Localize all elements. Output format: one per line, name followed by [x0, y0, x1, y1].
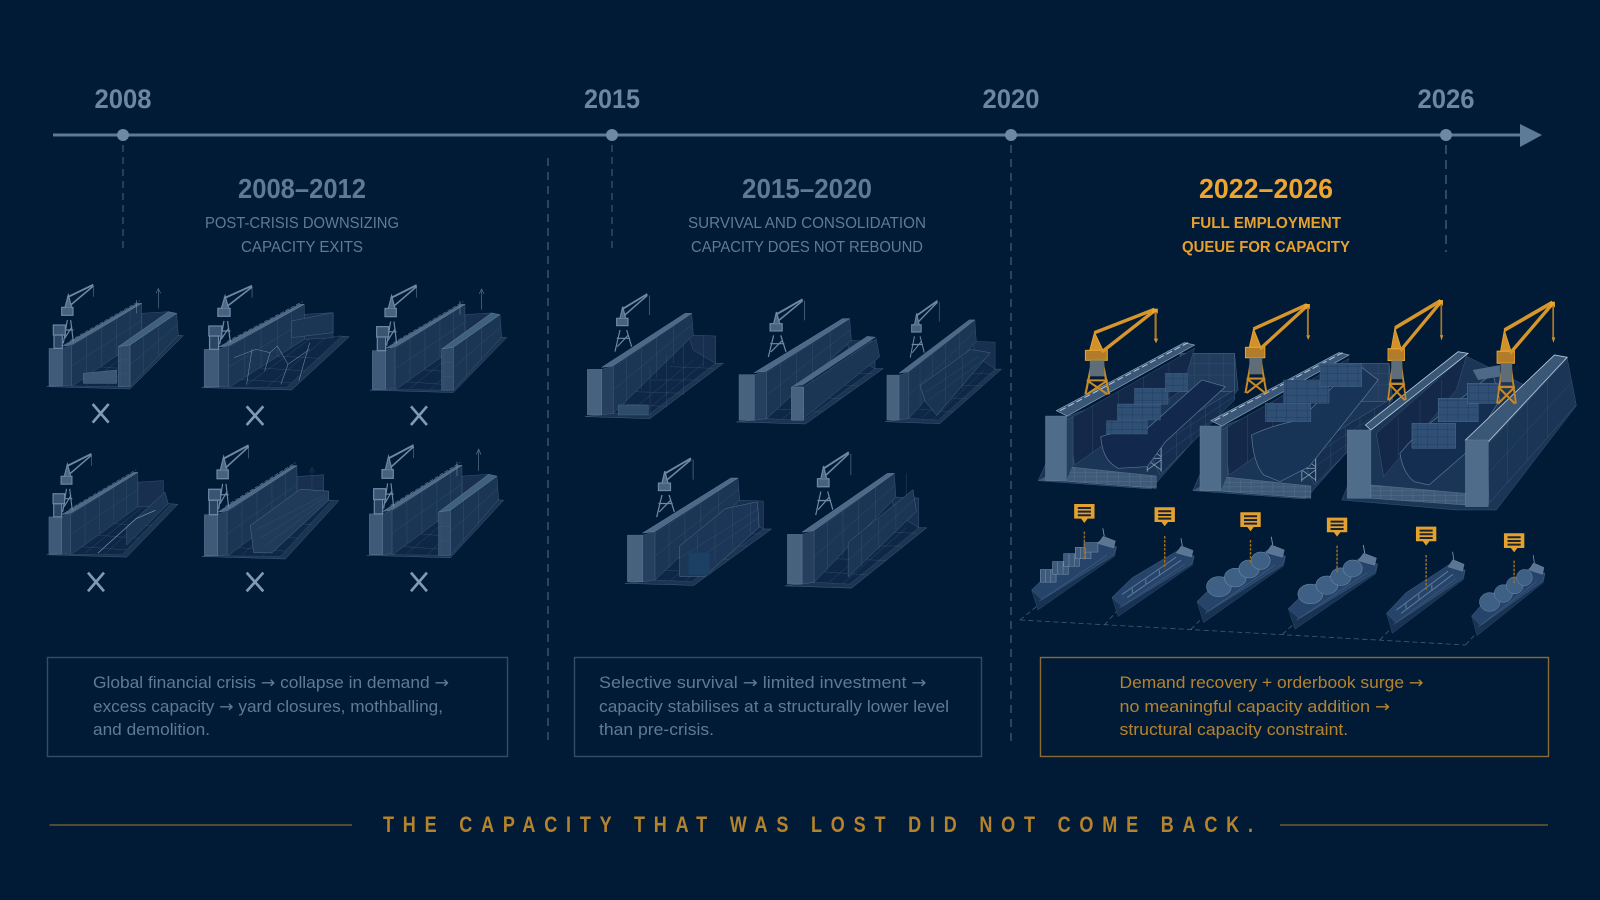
text box: global financial crisis: excess capacity → yard closures, mothballing, [93, 697, 443, 716]
ship 1: container [1032, 528, 1116, 610]
ship 2: tanker [1112, 538, 1194, 617]
order tag 6 [1504, 533, 1524, 583]
dock 5 [202, 445, 339, 559]
heading: 2022-2026 [1182, 173, 1350, 256]
ship 6: LNG [1472, 555, 1545, 636]
docks and X marks [47, 285, 507, 591]
crane 4 [1497, 302, 1555, 404]
queue ground line [1020, 607, 1476, 645]
milestone 2026 [1418, 84, 1474, 252]
timeline [53, 84, 1542, 252]
heading: 2015-2020: 2015–2020 [742, 173, 872, 204]
dock 6 [367, 445, 504, 558]
dock 2 with ship [1193, 353, 1393, 499]
heading: 2022-2026: 2022–2026 [1199, 173, 1333, 204]
X mark 2 [247, 406, 263, 425]
crane 1 [1085, 309, 1158, 394]
milestone 2020 [982, 84, 1040, 141]
milestone 2020: 2020 [982, 84, 1040, 114]
order tag 4 [1327, 518, 1347, 573]
dock 3 with ship and right wall [1342, 352, 1576, 510]
order tag 3 [1240, 512, 1261, 563]
closing text: THE CAPACITY THAT WAS LOST DID NOT COME BACK. [383, 813, 1253, 837]
text box: selective survival: capacity stabilises at a structurally lower level [599, 698, 949, 716]
heading: 2015-2020: CAPACITY DOES NOT REBOUND [691, 239, 923, 256]
right rule [1280, 824, 1548, 826]
X mark 5 [247, 573, 263, 591]
dock 2 [737, 299, 883, 424]
timeline axis [53, 134, 1525, 136]
heading: 2015-2020 [688, 173, 926, 256]
heading: 2008-2012: POST-CRISIS DOWNSIZING [205, 215, 399, 232]
heading: 2008-2012: 2008–2012 [238, 173, 366, 204]
dock 3 [370, 285, 507, 393]
order tag 5 [1416, 527, 1436, 590]
panel: 2008-2012 [47, 173, 507, 756]
milestone 2008 [94, 84, 152, 252]
text box: selective survival: than pre-crisis. [599, 721, 714, 739]
dock 3 [885, 301, 1002, 424]
order tag 2 [1155, 507, 1175, 568]
text box: selective survival: Selective survival → limited investment → [599, 673, 927, 692]
heading: 2008-2012: CAPACITY EXITS [241, 239, 363, 256]
docks [585, 294, 1002, 588]
ship 5: tanker [1387, 552, 1465, 633]
dock 1 [47, 285, 183, 389]
heading: 2015-2020: SURVIVAL AND CONSOLIDATION [688, 215, 926, 232]
milestone 2008: 2008 [94, 84, 152, 114]
text box: global financial crisis: and demolition. [93, 721, 210, 739]
X mark 4 [88, 573, 104, 591]
milestone 2015: 2015 [584, 84, 640, 114]
order tag 1 [1074, 504, 1095, 560]
panel: 2022-2026 [1020, 173, 1576, 756]
text box: demand recovery: Demand recovery + orderbook surge → [1120, 673, 1424, 692]
dock 5 [785, 452, 927, 588]
crane 2 [1245, 304, 1310, 393]
heading: 2022-2026: FULL EMPLOYMENT [1191, 215, 1341, 232]
panel: 2015-2020 [574, 173, 1002, 756]
heading: 2008-2012 [205, 173, 399, 256]
dock 4 [47, 454, 178, 557]
text box: demand recovery: structural capacity constraint. [1120, 721, 1348, 739]
dock 4 [625, 458, 772, 585]
left rule [50, 824, 352, 826]
X mark 6 [411, 573, 427, 591]
divider lines [548, 145, 1011, 745]
text box: demand recovery [1040, 658, 1548, 756]
heading: 2022-2026: QUEUE FOR CAPACITY [1182, 239, 1350, 256]
milestone 2026: 2026 [1418, 84, 1474, 114]
text box: global financial crisis: Global financial crisis → collapse in demand → [93, 673, 449, 692]
dock 1 with ship [1038, 343, 1238, 489]
docks, cranes, ships [1020, 300, 1576, 645]
text box: demand recovery: no meaningful capacity addition → [1120, 697, 1390, 716]
dock 2 damaged [202, 286, 349, 390]
text box: selective survival [574, 658, 982, 756]
crane 3 [1388, 300, 1443, 400]
X mark 1 [93, 404, 109, 423]
milestone 2015 [584, 84, 640, 252]
timeline arrowhead [1520, 124, 1542, 147]
text box: global financial crisis [48, 658, 508, 756]
dock 1 [585, 294, 723, 419]
ship 3: LNG [1197, 537, 1285, 623]
ship 4: LNG [1288, 545, 1378, 629]
X mark 3 [411, 406, 427, 425]
